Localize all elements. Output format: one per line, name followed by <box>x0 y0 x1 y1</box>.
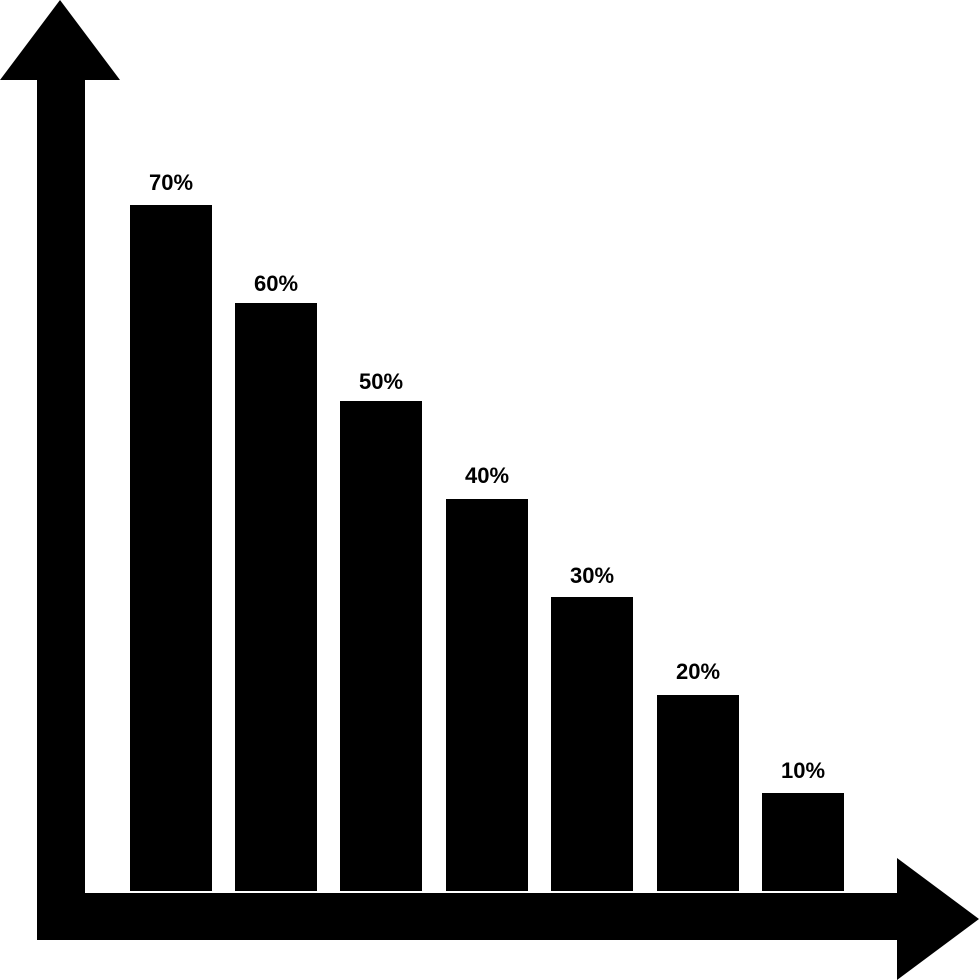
arrow: horizontal axis <box>37 858 979 980</box>
bar: 30% <box>551 563 633 891</box>
bar: 40% <box>446 463 528 891</box>
bar: 50%: 50% <box>359 369 403 394</box>
bar: 10%: 10% <box>781 758 825 783</box>
bar: 60%: 60% <box>254 271 298 296</box>
arrow: vertical axis <box>0 0 120 940</box>
bar: 40%: 40% <box>465 463 509 488</box>
bar: 50% <box>340 369 422 891</box>
bar: 70%: 70% <box>149 170 193 195</box>
bar: 10% <box>762 758 844 891</box>
bar: 70% <box>130 170 212 891</box>
bar: 60% <box>235 271 317 891</box>
bar: 20% <box>657 659 739 891</box>
bar: 30%: 30% <box>570 563 614 588</box>
bar: 20%: 20% <box>676 659 720 684</box>
